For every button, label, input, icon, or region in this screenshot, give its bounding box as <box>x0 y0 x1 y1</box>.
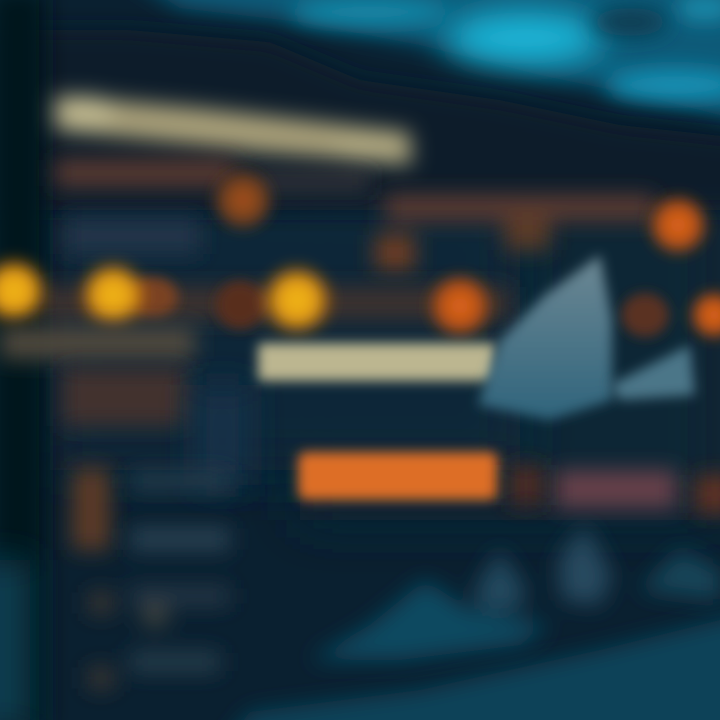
glow marker 1 <box>209 166 277 234</box>
glow marker 5 <box>424 270 496 342</box>
glow marker 6 <box>644 191 712 259</box>
orange button <box>298 452 498 500</box>
left orange column <box>72 468 110 550</box>
left brown panel <box>62 368 187 426</box>
pink secondary bar <box>555 470 677 508</box>
subtitle orange line <box>55 160 370 188</box>
left caption bar <box>0 327 195 359</box>
orange edge bar <box>695 475 720 513</box>
sky with cyan clouds <box>120 0 720 125</box>
middle column blue blocks <box>195 385 250 485</box>
glow marker 3 <box>75 257 178 333</box>
title bar <box>55 95 412 165</box>
dark mountain ridge <box>0 30 720 210</box>
large mountain peak <box>478 255 612 420</box>
glow marker 7 <box>621 287 720 343</box>
brown horizontal band <box>40 287 510 319</box>
bottom left teal glow <box>0 560 30 720</box>
left text row <box>65 218 200 254</box>
small mountain peak <box>610 345 695 400</box>
bottom right teal ground <box>220 610 720 720</box>
list rows <box>88 472 230 689</box>
pale label bar <box>258 343 496 381</box>
orange connector band <box>375 195 655 270</box>
left dark column <box>0 0 46 720</box>
glow marker 4 <box>216 260 337 340</box>
glow marker 2 <box>0 253 52 329</box>
brown connector <box>508 465 544 505</box>
bottom teal mountains <box>310 525 720 660</box>
